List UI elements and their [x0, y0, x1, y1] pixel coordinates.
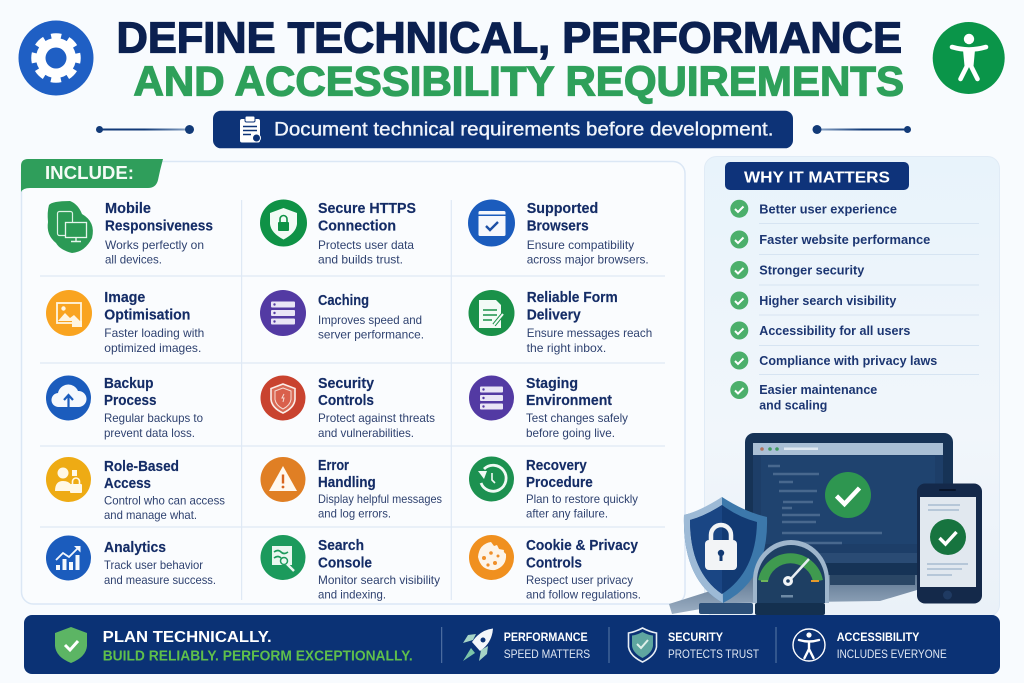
icon: gear — [18, 20, 94, 96]
subtitle banner — [213, 111, 793, 148]
title: Search — [318, 538, 364, 554]
laptop base — [669, 575, 925, 614]
description: Track user behavior — [104, 558, 203, 572]
title: Controls — [318, 393, 374, 409]
description: Plan to restore quickly — [526, 492, 638, 506]
description: optimized images. — [104, 341, 201, 355]
performance label: SPEED MATTERS — [504, 649, 590, 661]
icon: cookie — [469, 535, 514, 580]
item: staging environment — [469, 376, 628, 440]
description — [318, 573, 440, 602]
shield with lock — [684, 497, 767, 603]
description: and follow regulations. — [526, 588, 641, 602]
title: Recovery — [526, 458, 587, 474]
description: the right inbox. — [527, 341, 606, 355]
description: and measure success. — [104, 573, 216, 587]
illustration: devices — [669, 433, 982, 615]
icon: accessibility — [793, 629, 825, 661]
stand bars — [699, 603, 825, 615]
list item: and scaling — [759, 398, 827, 412]
description: prevent data loss. — [104, 426, 195, 440]
title: AND ACCESSIBILITY REQUIREMENTS — [134, 57, 904, 104]
item: analytics — [46, 536, 216, 587]
list item — [730, 381, 877, 412]
icon: rocket — [463, 628, 493, 661]
description — [318, 492, 442, 520]
title: Browsers — [527, 218, 589, 234]
laptop — [745, 433, 953, 585]
description: Monitor search visibility — [318, 573, 440, 587]
list item: Faster website performance — [759, 232, 930, 247]
description: Display helpful messages — [318, 492, 442, 506]
title: Role-Based — [104, 459, 179, 475]
title: Delivery — [527, 308, 581, 324]
description — [104, 411, 203, 440]
heading tab: include: INCLUDE: — [45, 163, 134, 183]
icon: user lock — [46, 457, 91, 502]
accessibility label: INCLUDES EVERYONE — [837, 649, 947, 661]
description — [527, 326, 652, 355]
description: all devices. — [105, 252, 162, 266]
title: Console — [318, 556, 372, 572]
heading: why it matters — [725, 162, 909, 190]
description: Ensure compatibility — [527, 238, 634, 252]
item: recovery procedure — [469, 456, 638, 520]
description: server performance. — [318, 328, 424, 342]
description — [104, 326, 204, 355]
title — [526, 376, 612, 409]
item: supported browsers — [468, 200, 649, 266]
description — [104, 494, 225, 522]
accessibility label: ACCESSIBILITY — [837, 632, 920, 644]
description — [526, 573, 641, 602]
list item: Better user experience — [759, 202, 897, 216]
icon: search chart — [260, 535, 306, 580]
title: Access — [104, 476, 151, 492]
icon: red shield — [260, 376, 306, 420]
title: Caching — [318, 293, 369, 309]
item: mobile responsiveness — [48, 201, 213, 266]
item: search console — [260, 535, 440, 602]
title: Optimisation — [104, 308, 190, 324]
icon: server — [469, 376, 514, 420]
subtitle text: Document technical requirements before development. — [274, 119, 774, 141]
icon: clipboard — [240, 116, 260, 142]
performance label: PERFORMANCE — [504, 632, 588, 644]
performance label — [504, 632, 590, 661]
list item — [730, 322, 910, 340]
title: Procedure — [526, 475, 593, 491]
description — [526, 411, 628, 440]
description: before going live. — [526, 426, 615, 440]
description: and log errors. — [318, 506, 391, 520]
list item: Accessibility for all users — [759, 323, 910, 338]
heading: why it matters: WHY IT MATTERS — [744, 170, 890, 187]
list item: Stronger security — [759, 262, 865, 278]
description: and vulnerabilities. — [318, 426, 414, 440]
title — [104, 290, 190, 324]
phone — [917, 484, 982, 604]
decorative connector: right — [812, 125, 911, 134]
description — [104, 558, 216, 587]
title: DEFINE TECHNICAL, PERFORMANCE — [116, 13, 902, 62]
item: security controls — [260, 376, 435, 440]
item: backup process — [46, 376, 203, 440]
icon: devices — [48, 201, 93, 253]
title — [318, 376, 374, 409]
description: and indexing. — [318, 588, 386, 602]
list item: Compliance with privacy laws — [759, 353, 937, 368]
title: Mobile — [105, 201, 151, 217]
title: Error — [318, 458, 349, 474]
decorative connector: left — [96, 125, 194, 134]
list item — [730, 261, 865, 279]
title — [526, 538, 638, 572]
title: Cookie & Privacy — [526, 538, 638, 554]
description: Improves speed and — [318, 313, 422, 327]
icon: server — [260, 290, 306, 336]
description: and manage what. — [104, 508, 197, 522]
description — [318, 313, 424, 342]
gauge — [753, 540, 829, 603]
title — [116, 13, 904, 104]
description — [526, 492, 638, 520]
icon: cloud upload — [46, 376, 91, 420]
description: Test changes safely — [526, 411, 628, 425]
list item — [730, 352, 937, 370]
item: error handling — [260, 457, 442, 520]
description: across major browsers. — [527, 252, 649, 266]
title — [526, 458, 593, 491]
icon: form pencil — [468, 290, 514, 336]
slogan — [103, 629, 413, 664]
item: secure https — [260, 200, 416, 266]
item: cookie and privacy controls — [469, 535, 641, 602]
title: Responsiveness — [105, 218, 213, 234]
description: after any failure. — [526, 506, 608, 520]
title — [104, 459, 179, 492]
panel: include — [21, 159, 685, 604]
title — [318, 538, 372, 572]
list item: Easier maintenance — [759, 382, 877, 397]
list item — [730, 200, 897, 218]
description — [318, 238, 414, 266]
title: Handling — [318, 475, 376, 491]
list item: Higher search visibility — [759, 293, 897, 308]
title: Image — [104, 290, 145, 306]
item: reliable form delivery — [468, 290, 652, 355]
title — [318, 201, 416, 234]
icon: bar chart — [46, 536, 91, 580]
item: role-based access — [46, 457, 225, 522]
title: Reliable Form — [527, 290, 618, 306]
title — [105, 201, 213, 234]
title: Process — [104, 393, 156, 409]
description: Faster loading with — [104, 326, 204, 340]
icon: image — [46, 290, 92, 336]
slogan: PLAN TECHNICALLY. — [103, 629, 272, 646]
security label: SECURITY — [668, 632, 723, 644]
title: Controls — [526, 556, 582, 572]
title: Supported — [527, 201, 598, 217]
title — [104, 376, 156, 409]
title: Staging — [526, 376, 578, 392]
list item — [730, 292, 897, 310]
icon: clock arrow — [469, 456, 514, 502]
description: Regular backups to — [104, 411, 203, 425]
title: Secure HTTPS — [318, 201, 416, 217]
icon: accessibility figure — [933, 22, 1005, 94]
description: Ensure messages reach — [527, 326, 652, 340]
security label — [668, 632, 759, 661]
description: and builds trust. — [318, 252, 403, 266]
title: Environment — [526, 393, 612, 409]
footer banner — [24, 615, 1000, 674]
icon: warning — [260, 457, 306, 502]
icon: shield lock — [260, 200, 307, 246]
heading tab: include — [21, 159, 163, 192]
icon: browser check — [468, 200, 515, 246]
title — [527, 290, 618, 324]
item: image optimisation — [46, 290, 204, 355]
title: Analytics — [104, 540, 166, 556]
panel: why it matters — [704, 156, 1000, 616]
title: Security — [318, 376, 374, 392]
description — [318, 411, 435, 440]
description: Control who can access — [104, 494, 225, 508]
description: Protects user data — [318, 238, 414, 252]
description — [105, 238, 204, 266]
icon: green shield — [55, 627, 87, 663]
description — [527, 238, 649, 266]
item: caching — [260, 290, 424, 342]
accessibility label — [837, 632, 947, 661]
slogan: BUILD RELIABLY. PERFORM EXCEPTIONALLY. — [103, 648, 413, 664]
title — [527, 201, 598, 234]
title — [318, 458, 376, 491]
icon: security shield — [628, 628, 656, 662]
security label: PROTECTS TRUST — [668, 649, 759, 661]
description: Works perfectly on — [105, 238, 204, 252]
description: Respect user privacy — [526, 573, 633, 587]
title: Connection — [318, 218, 396, 234]
description: Protect against threats — [318, 411, 435, 425]
title: Backup — [104, 376, 154, 392]
